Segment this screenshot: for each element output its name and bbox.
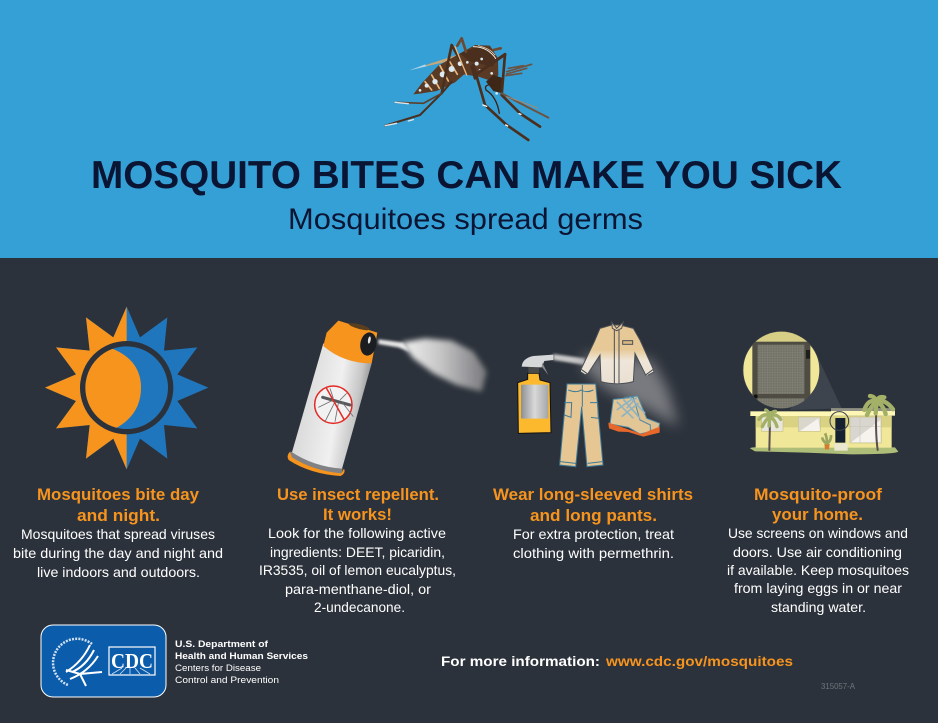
more information link: www.cdc.gov/mosquitoes (605, 653, 793, 669)
mist (553, 354, 678, 427)
no mosquito symbol (315, 386, 353, 423)
title: MOSQUITO BITES CAN MAKE YOU SICK (91, 154, 842, 197)
boots (608, 396, 660, 437)
house walls (756, 416, 892, 448)
panel text: day and night (13, 485, 223, 580)
panel text: clothing: Wear long-sleeved shirts (493, 485, 693, 504)
potted plant (822, 433, 831, 449)
nozzle (348, 322, 378, 357)
logo: HHS and CDC: CDC (111, 649, 153, 673)
panel text: clothing (493, 485, 693, 561)
palm trees (759, 396, 893, 450)
house roof (750, 408, 895, 416)
header band (0, 0, 938, 258)
panel text: day and night: bite during the day and night and (13, 545, 223, 561)
panel text: insect repellent: Use insect repellent. (277, 485, 439, 504)
panel text: insect repellent (259, 485, 456, 615)
panel text: day and night: and night. (77, 506, 160, 525)
can body (292, 343, 372, 470)
panel text: home: from laying eggs in or near (734, 580, 902, 596)
agency names: Control and Prevention (175, 675, 279, 686)
icon: clothing and spray bottle (518, 322, 678, 467)
panel text: insect repellent: IR3535, oil of lemon eucalyptus, (259, 562, 456, 578)
more information link (441, 653, 793, 669)
publication number: 315057-A (821, 682, 856, 691)
panel text: home: doors. Use air conditioning (733, 544, 902, 560)
panel text: home: Use screens on windows and (728, 525, 908, 541)
panel text: home (727, 485, 909, 615)
panel text: home: your home. (772, 505, 863, 524)
subtitle: Mosquitoes spread germs (288, 203, 643, 236)
panel text: clothing: clothing with permethrin. (513, 545, 674, 561)
can cap (323, 321, 377, 363)
spray bottle (518, 355, 553, 433)
door (830, 412, 849, 451)
panel text: clothing: For extra protection, treat (513, 526, 674, 542)
panel text: home: if available. Keep mosquitoes (727, 562, 909, 578)
panel text: insect repellent: ingredients: DEET, picaridin, (270, 544, 445, 560)
panel text: day and night: live indoors and outdoors. (37, 564, 200, 580)
panel text: insect repellent: para-menthane-diol, or (285, 581, 431, 597)
pants (560, 384, 603, 467)
logo: HHS and CDC (41, 625, 166, 697)
icon: house with magnified screen door (735, 330, 898, 454)
magnifier beam (790, 358, 842, 410)
panel text: insect repellent: It works! (323, 505, 392, 524)
spray mist (378, 338, 487, 392)
panel text: insect repellent: Look for the following active (268, 525, 446, 541)
panel text: day and night: Mosquitoes that spread viruses (21, 526, 215, 542)
agency names: Health and Human Services (175, 651, 308, 662)
agency names (175, 639, 308, 686)
windows (762, 417, 881, 443)
shirt (581, 322, 654, 384)
panel text: day and night: Mosquitoes bite day (37, 485, 200, 504)
magnifier lens (742, 332, 820, 408)
panel text: home: standing water. (771, 599, 866, 615)
icon: insect repellent can (288, 321, 487, 476)
more information link: For more information: (441, 653, 600, 669)
can base (288, 451, 345, 476)
icon: sun and moon (45, 307, 208, 469)
ground (750, 447, 898, 454)
agency names: Centers for Disease (175, 663, 261, 674)
agency names: U.S. Department of (175, 639, 269, 650)
dark lower panel (0, 258, 938, 723)
icon: mosquito (385, 38, 548, 140)
panel text: clothing: and long pants. (530, 506, 657, 525)
panel text: home: Mosquito-proof (754, 485, 882, 504)
panel text: insect repellent: 2-undecanone. (314, 599, 405, 615)
